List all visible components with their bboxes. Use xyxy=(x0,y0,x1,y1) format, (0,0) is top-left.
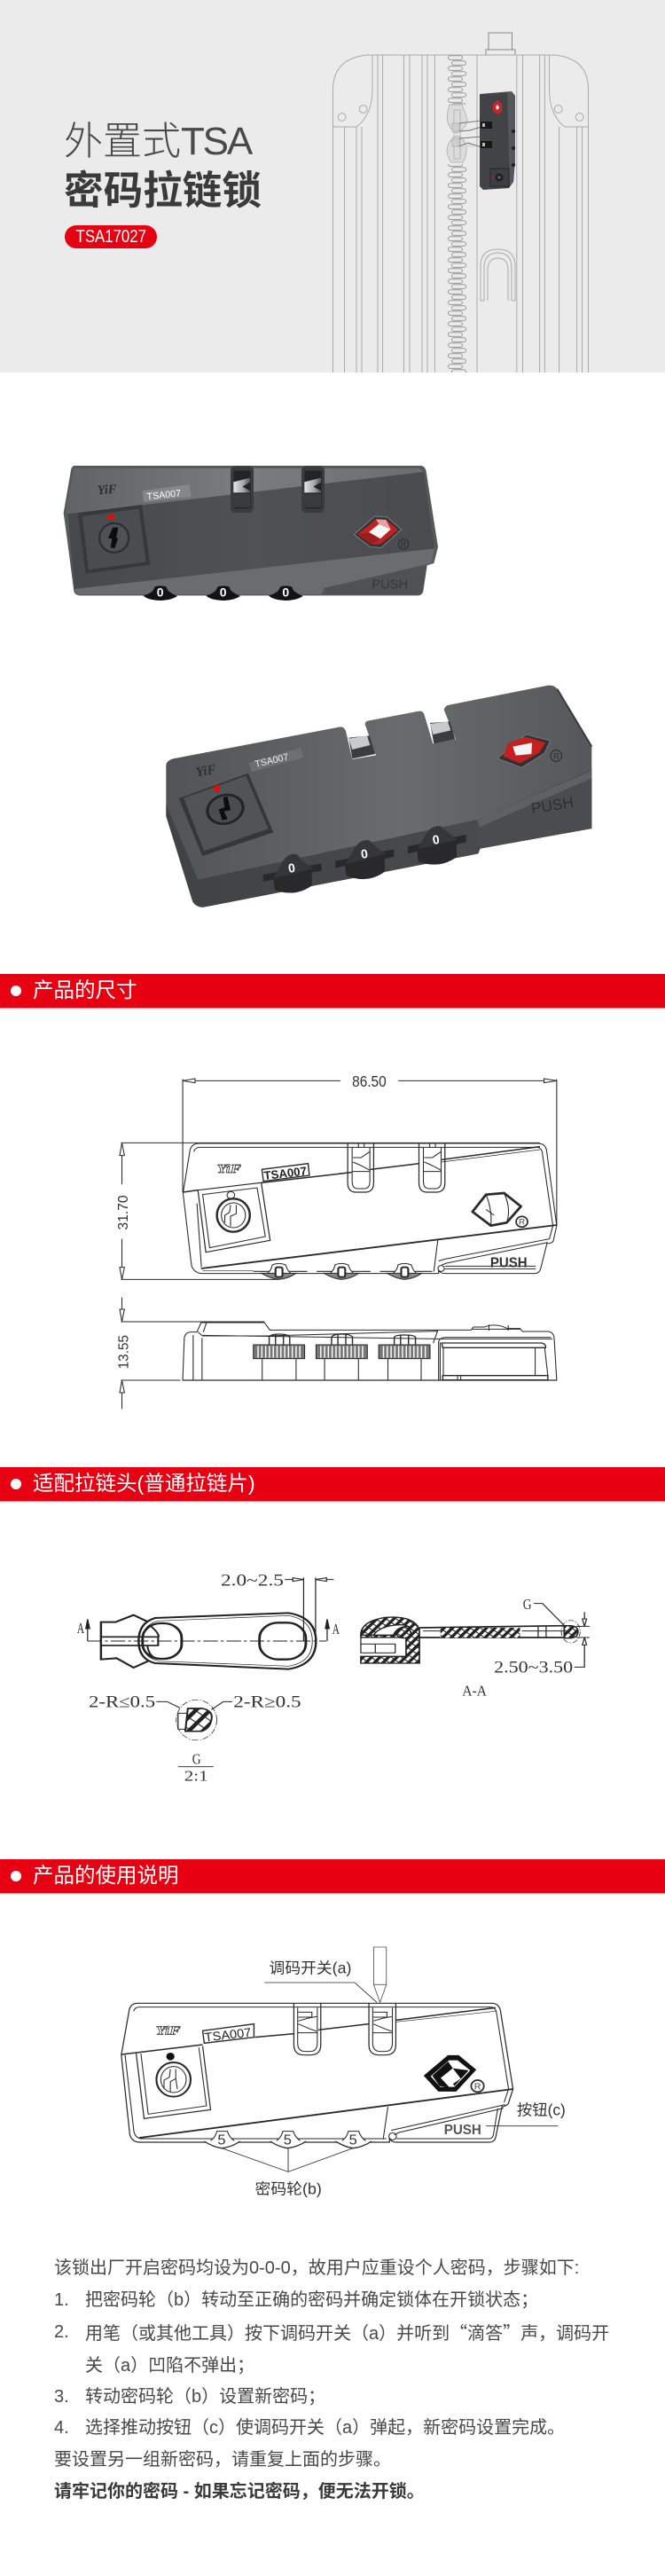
detail radius notes: 2-R≤0.5 xyxy=(89,1692,155,1711)
slider slots xyxy=(348,1143,445,1192)
model plate: TSA007 xyxy=(263,1164,308,1182)
side outline xyxy=(183,1323,557,1380)
instruction text: 转动密码轮（b）设置新密码； xyxy=(85,2387,325,2407)
push label: PUSH xyxy=(529,793,575,817)
model plate xyxy=(143,484,192,502)
instruction text: 关（a）凹陷不弹出； xyxy=(85,2356,254,2376)
suitcase handle base xyxy=(486,33,515,55)
section heading: instructions: 产品的使用说明 xyxy=(33,1864,179,1887)
lock body xyxy=(64,466,438,595)
height dimension xyxy=(115,1143,540,1279)
brand mark: YiF xyxy=(217,1162,241,1176)
product photo: lock front view xyxy=(64,466,438,601)
intro line: 该锁出厂开启密码均设为0-0-0，故用户应重设个人密码，步骤如下: xyxy=(54,2258,579,2278)
detail callout G xyxy=(523,1597,580,1643)
combination wheels: 0 xyxy=(287,860,296,876)
section heading: dimensions xyxy=(0,974,665,1009)
tip thickness dimension xyxy=(494,1612,590,1677)
step 2 xyxy=(54,2319,609,2376)
pen pressing switch xyxy=(373,1947,387,2002)
push label: PUSH xyxy=(490,1256,528,1270)
combination wheels xyxy=(263,826,466,893)
push label: PUSH xyxy=(444,2123,481,2138)
instruction text: 4. xyxy=(54,2418,69,2438)
combination wheels: 0 xyxy=(220,585,227,600)
registered mark: R xyxy=(519,1218,525,1228)
key pad xyxy=(179,774,273,856)
detail radius notes: 2-R≥0.5 xyxy=(233,1692,301,1711)
brand mark: YiF xyxy=(194,762,217,781)
detail callout G: G xyxy=(523,1597,532,1613)
callout: wheels b xyxy=(222,2148,353,2197)
combination wheels: 0 xyxy=(360,846,369,861)
section heading: compatible zipper pull xyxy=(0,1467,665,1502)
tsa slider slots xyxy=(348,721,455,758)
width dimension: 86.50 xyxy=(352,1073,387,1090)
section view A-A xyxy=(361,1617,578,1663)
registered mark: R xyxy=(401,540,406,549)
illustration: suitcase with zipper and lock xyxy=(332,32,589,373)
model plate xyxy=(249,748,304,772)
lock on suitcase xyxy=(480,91,515,190)
wheels side view xyxy=(254,1334,430,1380)
instruction text: 1. xyxy=(54,2290,69,2310)
brand mark: YiF xyxy=(156,2024,181,2038)
section markers: A xyxy=(77,1621,84,1637)
width dimension xyxy=(183,1073,557,1226)
slot width dimension xyxy=(221,1571,333,1641)
registered mark xyxy=(551,750,562,761)
dimension drawing: side view xyxy=(116,1297,557,1409)
model badge xyxy=(65,225,157,248)
combination wheels: 0 xyxy=(282,585,289,600)
combination wheels: 0 xyxy=(157,585,164,600)
model plate: TSA007 xyxy=(254,752,290,770)
instruction text: 选择推动按钮（c）使调码开关（a）弹起，新密码设置完成。 xyxy=(85,2418,565,2438)
zipper pull sliders xyxy=(447,105,481,162)
product photo: lock angled view xyxy=(166,685,592,907)
section markers: A xyxy=(332,1622,340,1637)
key pad xyxy=(198,1182,270,1253)
slider slots xyxy=(293,2003,395,2055)
registered mark xyxy=(471,2080,484,2092)
tsa slider slots xyxy=(231,466,325,513)
step 1 xyxy=(54,2290,538,2310)
title line two: 密码拉链锁 xyxy=(64,169,262,213)
push label: PUSH xyxy=(372,577,408,592)
detail radius notes xyxy=(89,1692,301,1711)
combination wheels: 5 xyxy=(349,2133,357,2148)
detail scale note: 2:1 xyxy=(184,1768,208,1785)
detail scale note xyxy=(178,1751,214,1785)
tsa logo xyxy=(354,516,402,547)
thickness dimension xyxy=(116,1298,264,1409)
combination wheels xyxy=(204,2132,372,2148)
zipper teeth xyxy=(448,55,466,373)
slot width dimension: 2.0~2.5 xyxy=(221,1571,284,1590)
warning note: 请牢记你的密码 - 如果忘记密码，便无法开锁。 xyxy=(54,2482,425,2501)
callout: button c: 按钮(c) xyxy=(517,2101,566,2118)
registered mark: R xyxy=(553,752,559,761)
section markers xyxy=(77,1621,340,1637)
model plate: TSA007 xyxy=(146,488,182,502)
lock outline xyxy=(183,1143,557,1274)
section view label: A-A xyxy=(462,1683,487,1700)
section heading: instructions xyxy=(0,1859,665,1894)
section heading: dimensions: 产品的尺寸 xyxy=(33,978,137,1001)
usage diagram xyxy=(121,1946,566,2197)
dimension drawing: front view xyxy=(115,1073,557,1280)
model plate: TSA007 xyxy=(204,2026,252,2045)
model badge: TSA17027 xyxy=(75,227,146,247)
instruction text: 3. xyxy=(54,2387,69,2407)
callout: switch a xyxy=(264,1959,377,2002)
zipper pull technical drawing xyxy=(77,1571,590,1785)
brand mark: YiF xyxy=(97,483,117,498)
instruction text: 把密码轮（b）转动至正确的密码并确定锁体在开锁状态； xyxy=(85,2290,538,2310)
registered mark xyxy=(398,539,409,549)
thickness dimension: 13.55 xyxy=(116,1335,132,1369)
registered mark xyxy=(516,1216,528,1228)
instruction text xyxy=(54,2258,609,2501)
callout: wheels b: 密码轮(b) xyxy=(255,2180,322,2197)
suitcase outline xyxy=(333,55,589,373)
tip thickness dimension: 2.50~3.50 xyxy=(494,1657,573,1677)
combination wheels: 0 xyxy=(432,832,441,847)
key pad xyxy=(137,2046,211,2118)
callout: button c xyxy=(486,2101,566,2126)
step 3 xyxy=(54,2386,325,2407)
tsa logo xyxy=(473,1193,521,1226)
pull top view xyxy=(86,1613,329,1669)
callout: switch a: 调码开关(a) xyxy=(270,1959,351,1976)
repeat note: 要设置另一组新密码，请重复上面的步骤。 xyxy=(54,2450,391,2470)
registered mark: R xyxy=(474,2083,481,2092)
section heading: compatible zipper pull: 适配拉链头(普通拉链片) xyxy=(33,1472,255,1495)
instruction text: 2. xyxy=(54,2322,69,2342)
combination wheels xyxy=(144,585,303,601)
lock outline xyxy=(121,2003,513,2142)
combination wheels: 5 xyxy=(284,2133,292,2148)
detail scale note: G xyxy=(192,1751,201,1768)
title line one: 外置式TSA xyxy=(64,120,251,163)
hero banner xyxy=(0,0,665,373)
height dimension: 31.70 xyxy=(115,1195,131,1230)
tsa logo xyxy=(497,734,551,767)
combination wheels xyxy=(262,1263,422,1279)
detail G enlarged xyxy=(156,1700,232,1740)
instruction text: 用笔（或其他工具）按下调码开关（a）并听到“滴答”声，调码开 xyxy=(85,2319,609,2344)
tsa logo xyxy=(425,2055,475,2091)
push button side view xyxy=(439,1338,551,1380)
combination wheels: 5 xyxy=(217,2133,226,2148)
step 4 xyxy=(54,2418,565,2438)
key pad xyxy=(78,505,150,574)
lock body xyxy=(166,686,591,907)
